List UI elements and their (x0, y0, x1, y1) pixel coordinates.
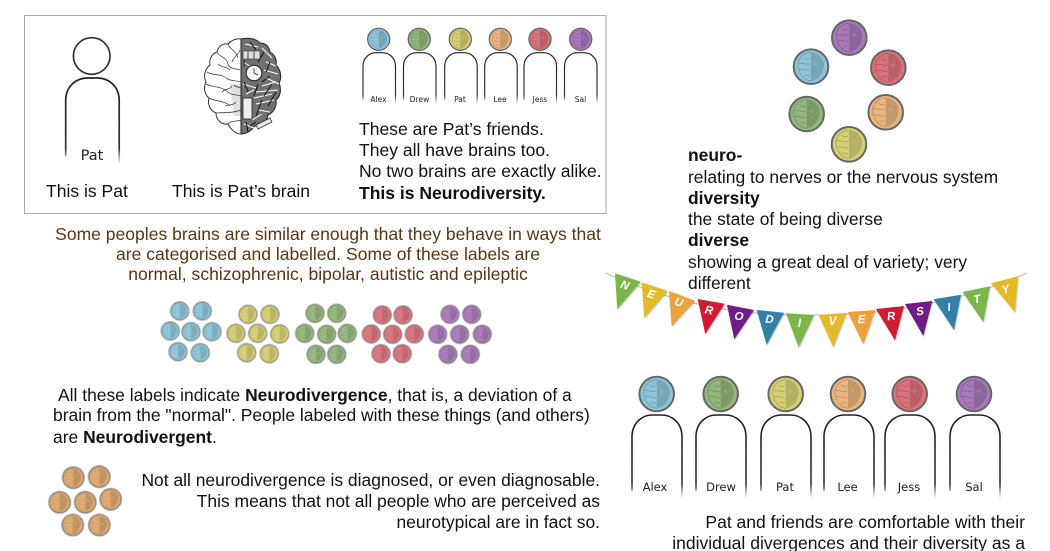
banner: NEURODIVERSITY bunting (605, 273, 1027, 347)
flag: Y (991, 276, 1018, 312)
icon: Pat figure: Pat (81, 148, 104, 164)
friend: Alex (363, 28, 396, 105)
flag: V (819, 313, 847, 347)
cluster: green (296, 304, 356, 363)
friend: Pat: Pat (454, 95, 466, 104)
icon group: five clusters of coloured brains (161, 302, 491, 363)
friend: Jess (885, 377, 935, 499)
friend: Sal: Sal (965, 480, 983, 494)
friend: Jess: Jess (897, 480, 920, 494)
text block: Pat's friends: They all have brains too. (359, 140, 550, 160)
text block: definitions: diverse (688, 230, 749, 250)
flag: T (963, 286, 990, 322)
friend: Alex (632, 377, 682, 499)
flag: E (642, 282, 668, 318)
text block: undiagnosed neurodivergence: This means that not all people who are perceived as (197, 491, 600, 511)
cluster: red (362, 306, 423, 363)
friend: Lee (485, 28, 517, 105)
cluster: purple (429, 305, 491, 363)
text block: definitions: showing a great deal of variety; very (688, 252, 967, 272)
flag: S: S (916, 305, 925, 318)
flag: R (876, 306, 904, 340)
flag: U (669, 291, 695, 326)
text block: labels explanation: Some peoples brains are similar enough that they behave in ways that (55, 224, 601, 244)
flag: E (848, 310, 875, 344)
flag: R: R (886, 310, 897, 324)
flag: V: V (829, 316, 838, 328)
friend: Pat (445, 28, 477, 105)
text block: Pat's friends: This is Neurodiversity. (359, 183, 546, 203)
text block: undiagnosed neurodivergence (141, 470, 600, 532)
friend: Sal: Sal (575, 95, 586, 104)
friend: Jess (524, 28, 556, 105)
friend: Jess: Jess (532, 95, 547, 104)
flag: R: R (704, 304, 715, 318)
flag: O (727, 305, 754, 339)
friend: Lee: Lee (493, 95, 507, 104)
flag: T: T (973, 293, 983, 307)
text block: definitions: relating to nerves or the nervous system (688, 167, 998, 187)
friend: Alex: Alex (643, 480, 668, 494)
text block: neurodivergence definition: All these labels indicate Neurodivergence, that is, a deviation of a (58, 385, 572, 405)
friend: Pat: Pat (776, 480, 794, 494)
text block: neurodivergence definition: are Neurodivergent. (53, 427, 217, 447)
flag: D (757, 310, 784, 345)
text block: definitions (688, 145, 998, 293)
panel: Pat and brain intro (24, 16, 606, 214)
figures: small row of friends (363, 28, 597, 105)
friend: Drew: Drew (410, 95, 429, 104)
text block: closing statement (672, 512, 1025, 551)
text block: closing statement: Pat and friends are comfortable with their (705, 512, 1025, 532)
flag: D: D (765, 314, 774, 326)
text block: definitions: the state of being diverse (688, 209, 883, 229)
text block: Pat's friends: No two brains are exactly alike. (359, 161, 602, 181)
text block: Pat's friends (359, 119, 602, 203)
text block: labels explanation: normal, schizophrenic, bipolar, autistic and epileptic (128, 264, 528, 284)
text block: undiagnosed neurodivergence: neurotypical are in fact so. (396, 512, 600, 532)
icon: cluster of undiagnosed orange brains (49, 466, 121, 536)
friend: Drew (404, 28, 436, 105)
caption: This is Pat's brain: This is Pat’s brain (172, 181, 310, 201)
friend: Drew: Drew (706, 480, 736, 494)
caption: This is Pat: This is Pat (46, 181, 128, 201)
flag: I (786, 313, 814, 347)
friend: Sal (564, 28, 597, 105)
friend: Alex: Alex (370, 95, 387, 104)
flag: U: U (673, 296, 685, 310)
friend: Drew (696, 377, 746, 499)
flag: E: E (646, 288, 657, 302)
flag: R (698, 299, 725, 334)
friend: Lee (824, 377, 874, 499)
flag: I: I (947, 302, 953, 314)
flag: N: N (619, 279, 631, 293)
flag: N (615, 273, 641, 309)
flag: E: E (857, 314, 866, 326)
flag: O: O (733, 310, 744, 324)
cluster: yellow (227, 305, 289, 363)
text block: neurodivergence definition: brain from the "normal". People labeled with these things (and others) (53, 405, 590, 425)
friend: Pat (761, 377, 811, 499)
icon: half organic half mechanical brain (205, 38, 281, 134)
text block: definitions: different (688, 273, 751, 293)
friend: Lee: Lee (837, 480, 858, 494)
text block: neurodivergence definition (53, 385, 590, 447)
flag: I (934, 295, 961, 330)
flag: I: I (798, 318, 802, 330)
text block: definitions: neuro- (688, 145, 742, 165)
text block: Pat's friends: These are Pat’s friends. (359, 119, 544, 139)
text block: labels explanation: are categorised and labelled. Some of these labels are (116, 244, 540, 264)
flag: S (905, 301, 932, 336)
text block: undiagnosed neurodivergence: Not all neurodivergence is diagnosed, or even diagnosable. (141, 470, 600, 490)
icon: Pat figure (66, 38, 119, 165)
icon: ring of six coloured brains (789, 20, 906, 162)
text block: labels explanation (55, 224, 601, 284)
text block: definitions: diversity (688, 188, 760, 208)
cluster: blue (161, 302, 221, 362)
figures: large row of friends (632, 377, 1000, 499)
flag: Y: Y (1001, 283, 1012, 297)
friend: Sal (950, 377, 1000, 499)
